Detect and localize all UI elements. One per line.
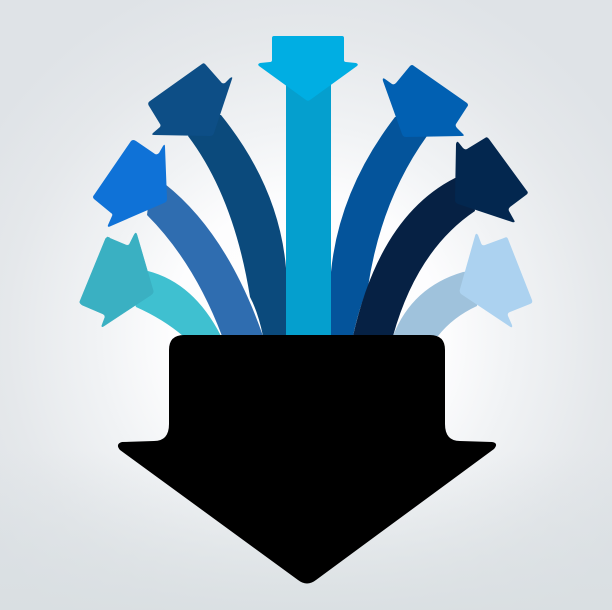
arrow: medium blue bbox=[93, 140, 263, 336]
arrow: dark teal-navy bbox=[148, 63, 286, 336]
big black down arrow bbox=[118, 335, 496, 584]
arrow: centre cyan bbox=[258, 36, 358, 336]
arrow: light blue bbox=[393, 234, 532, 336]
arrow: teal bbox=[80, 233, 221, 336]
arrow: royal blue bbox=[331, 65, 468, 336]
arrow: dark navy bbox=[353, 137, 528, 336]
